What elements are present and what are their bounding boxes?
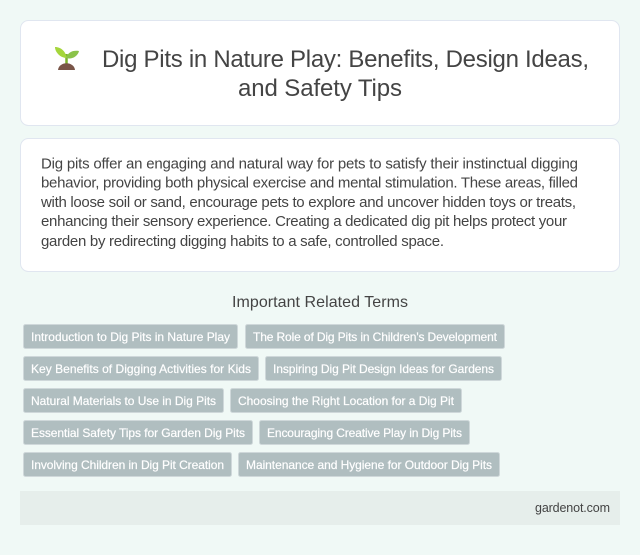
tag list: The Role of Dig Pits in Children's Development	[253, 330, 498, 344]
title: Dig Pits in Nature Play: Benefits, Design Ideas,	[102, 46, 589, 73]
tag list: Choosing the Right Location for a Dig Pit	[238, 394, 455, 408]
description text: enhancing their sensory experience. Creating a dedicated dig pit helps protect your	[41, 213, 567, 230]
tag list: Introduction to Dig Pits in Nature Play	[31, 330, 230, 344]
tag list: Inspiring Dig Pit Design Ideas for Gardens	[273, 362, 494, 376]
description text: behavior, providing both physical exercise and mental stimulation. These areas, filled	[41, 174, 578, 192]
description text: with loose soil or sand, encourage pets to explore and uncover hidden toys or treats,	[40, 194, 576, 211]
description text	[40, 156, 578, 250]
description text: Dig pits offer an engaging and natural way for pets to satisfy their instinctual digging	[41, 156, 578, 172]
title	[102, 46, 589, 102]
tag list: Encouraging Creative Play in Dig Pits	[267, 426, 462, 440]
panel: description	[20, 138, 620, 272]
tag list	[24, 324, 504, 476]
description text: garden by redirecting digging habits to a safe, controlled space.	[41, 233, 444, 250]
tag list: Involving Children in Dig Pit Creation	[31, 458, 224, 472]
icon: seedling	[55, 47, 79, 70]
footer: gardenot.com	[535, 501, 610, 515]
heading: important related terms: Important Related Terms	[232, 294, 408, 311]
title: and Safety Tips	[238, 75, 402, 102]
tag list: Maintenance and Hygiene for Outdoor Dig Pits	[246, 458, 492, 472]
tag list: Key Benefits of Digging Activities for Kids	[31, 362, 251, 376]
tag list: Essential Safety Tips for Garden Dig Pits	[31, 426, 245, 440]
tag list: Natural Materials to Use in Dig Pits	[31, 394, 216, 408]
footer	[20, 491, 620, 525]
panel: title header	[20, 20, 620, 126]
